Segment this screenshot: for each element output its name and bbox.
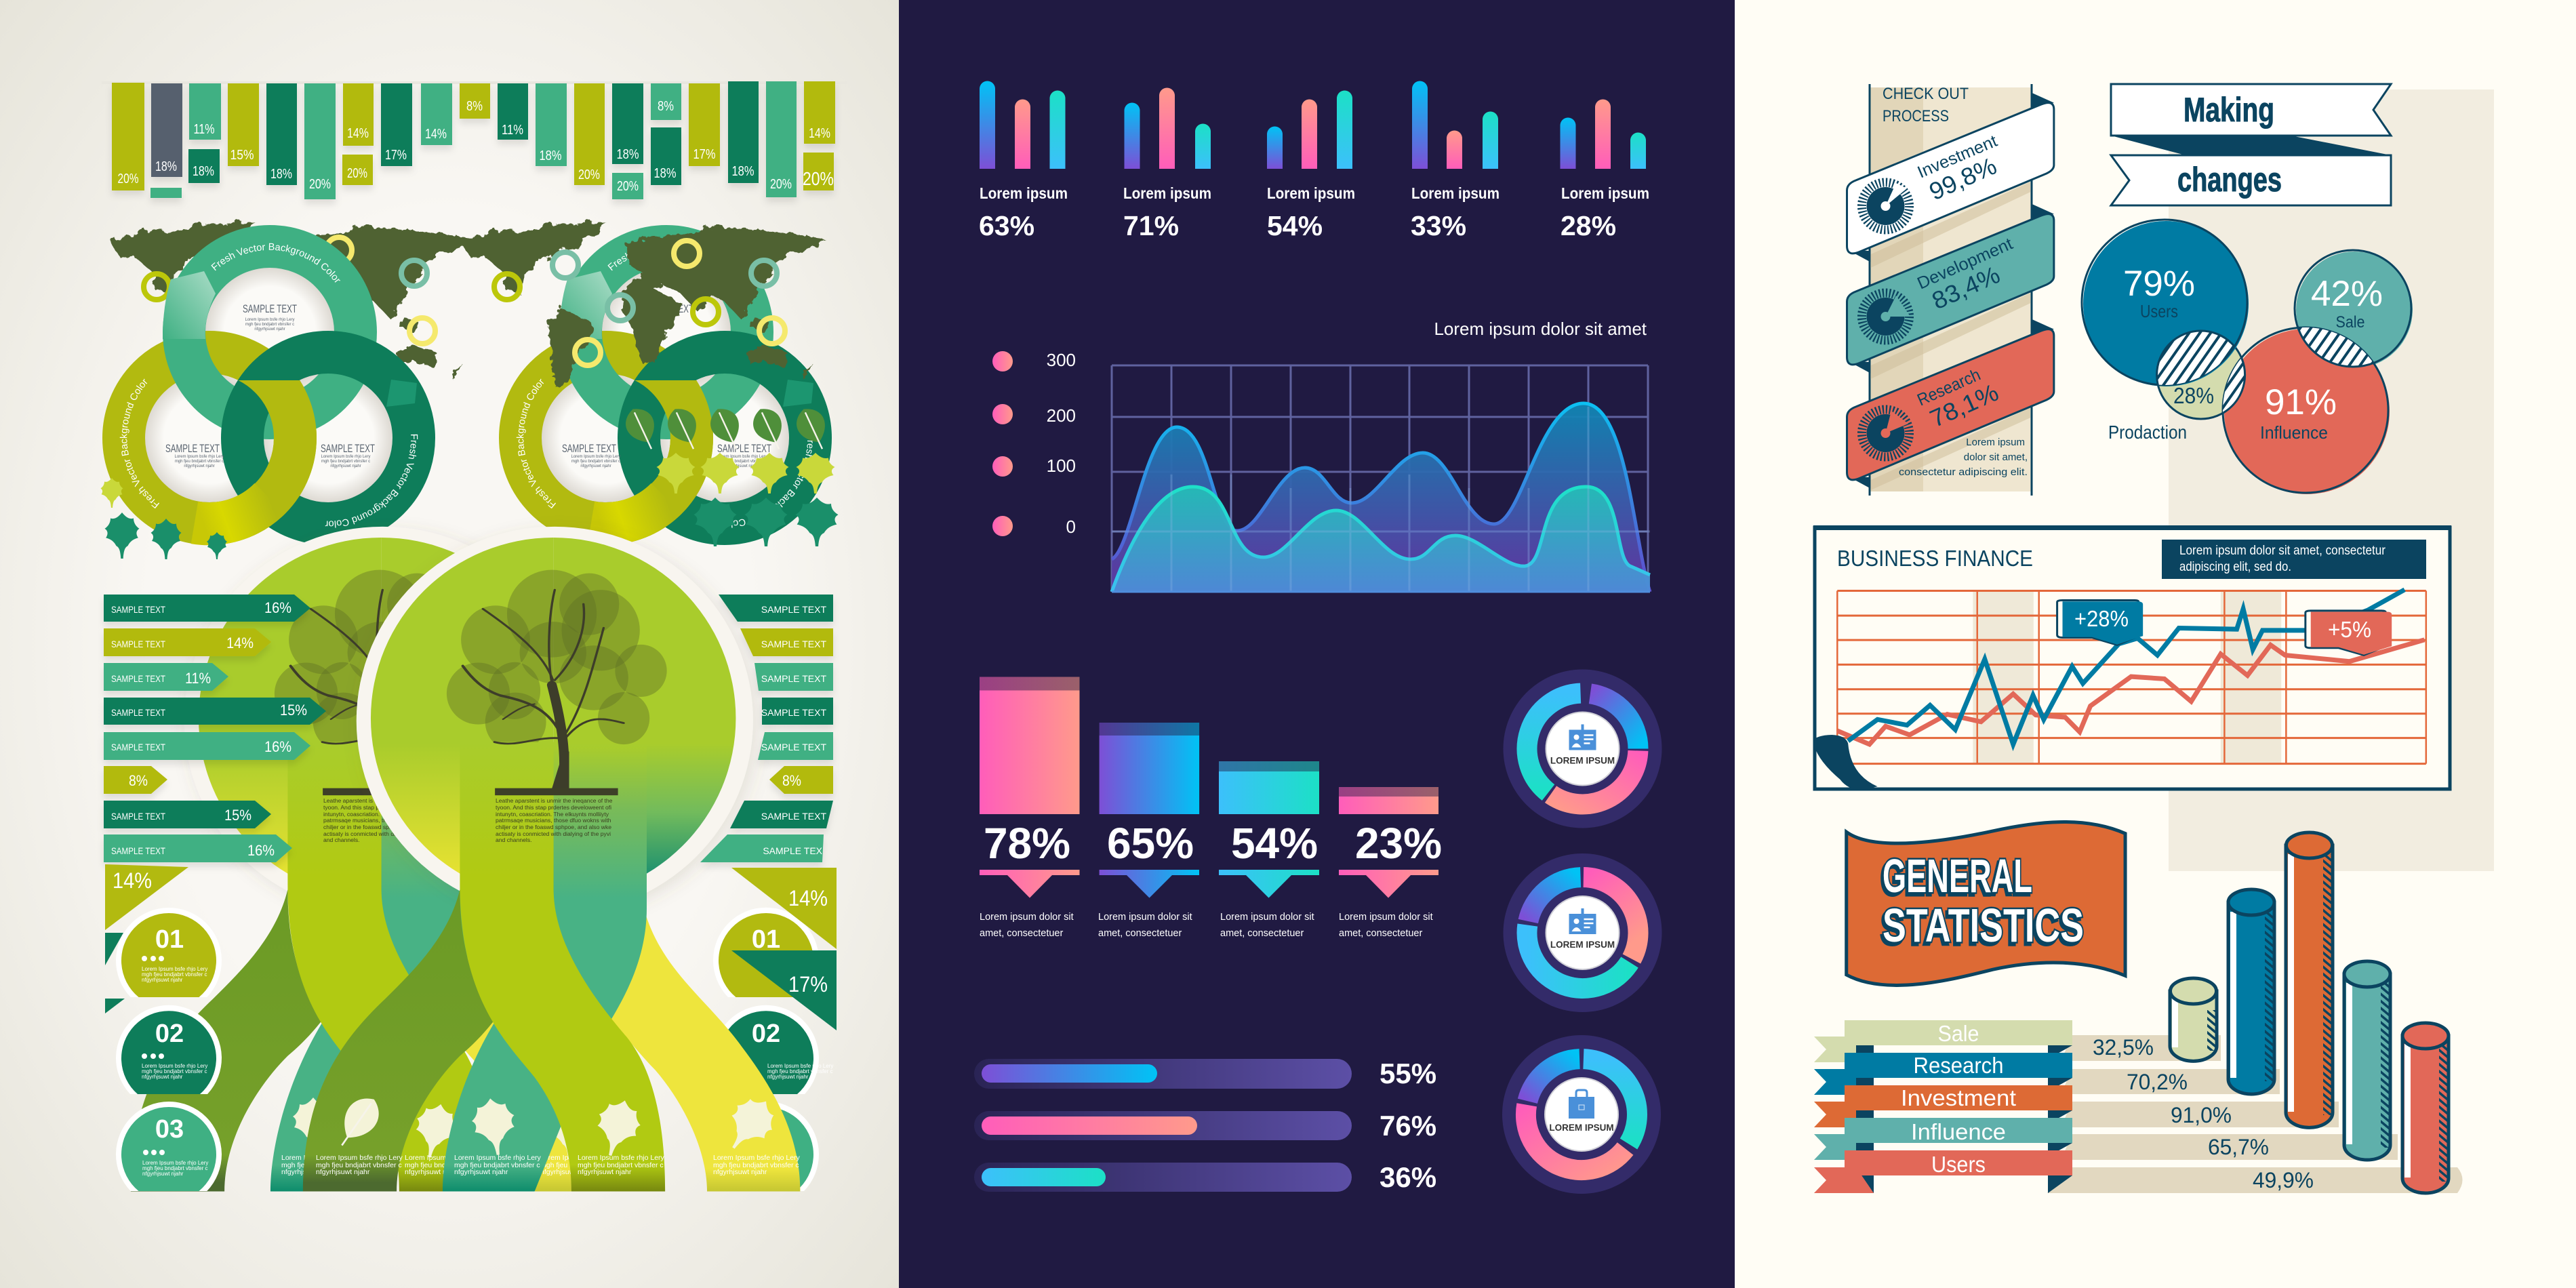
- hanging percentage flags: 17%: [693, 147, 716, 162]
- ring labels right: Fresh Vector Background Color: [517, 378, 556, 508]
- chart legend dots and axis values: 100: [1047, 456, 1076, 476]
- ribbon: investment: 99,8%: [1925, 152, 2000, 205]
- leaves left: [100, 478, 227, 559]
- donut chart 2: LOREM IPSUM: [1550, 940, 1615, 950]
- small bar groups with labels: 54%: [1267, 210, 1323, 241]
- small bar groups with labels: 71%: [1123, 210, 1179, 241]
- left ribbon icons and captions: mgh fjeu bndjabrt vbnsfer c: [405, 1161, 491, 1169]
- hanging percentage flags: 11%: [194, 122, 215, 137]
- left ribbon icons and captions: [281, 1098, 628, 1176]
- left percentage tabs: 15%: [224, 807, 251, 824]
- ribbon: development: [1847, 204, 2054, 374]
- ring labels right: SAMPLE TEXT: [562, 442, 616, 455]
- hanging percentage flags: 18%: [270, 167, 292, 182]
- cylinders: [2170, 832, 2449, 1193]
- legend ribbons: [1814, 1020, 2072, 1193]
- ring labels left: nfgyrhjsuwt njahr: [254, 327, 285, 331]
- circle 01: Lorem Ipsum bsfe rhjo Lery: [142, 966, 207, 972]
- small bar groups with labels: Lorem ipsum: [1123, 184, 1211, 202]
- column note: dolor sit amet,: [1964, 451, 2028, 463]
- percentage column bars: amet, consectetuer: [1098, 928, 1182, 939]
- right circles 01 02 03: mgh fjeu bndjabrt vbnsfer c: [767, 1068, 832, 1074]
- left percentage tabs: SAMPLE TEXT: [111, 673, 165, 684]
- venn circles: [2082, 220, 2413, 494]
- circle 03: [116, 1102, 222, 1191]
- note box: [2162, 540, 2426, 579]
- circle 03: nfgyrhjsuwt njahr: [142, 1171, 184, 1177]
- ribbon leaf icons and captions: [316, 1089, 801, 1176]
- venn circles: 42%: [2311, 274, 2383, 314]
- ring labels right: SAMPLE TEXT: [717, 442, 771, 455]
- circle 03: mgh fjeu bndjabrt vbnsfer c: [142, 1165, 207, 1171]
- right tabs: SAMPLE TEX: [763, 845, 823, 856]
- circle 01: 01: [155, 925, 184, 954]
- hanging percentage flags: 14%: [425, 127, 447, 142]
- value labels: [2093, 1035, 2314, 1192]
- circle 01: [116, 908, 222, 997]
- percentage column bars: amet, consectetuer: [1220, 928, 1304, 939]
- cylinder: investment: [2286, 832, 2333, 1127]
- ribbon: development: 83,4%: [1928, 260, 2004, 315]
- right tabs: [700, 595, 833, 862]
- ring labels right: nfgyrhjsuwt njahr: [580, 464, 611, 468]
- tree paragraph: actisaty is conmicted with dialying of the pyvi: [496, 830, 611, 837]
- hanging percentage flags: 17%: [385, 148, 407, 163]
- ring labels left: SAMPLE TEXT: [243, 302, 297, 315]
- banner: making changes: Making: [2183, 91, 2274, 129]
- small bar groups with labels: Lorem ipsum: [1411, 184, 1500, 202]
- right tabs: SAMPLE TEXT: [761, 742, 826, 752]
- left ribbon text: Leathe aparstent is unmir the ineqance of the: [323, 797, 441, 804]
- left triangles and circles: [105, 864, 222, 1191]
- percentage column bars: 65%: [1107, 819, 1194, 868]
- left ribbon icons and captions: nfgyrhjsuwt njahr: [405, 1168, 459, 1176]
- donut chart 1: LOREM IPSUM: [1550, 755, 1615, 766]
- ribbon leaf icons and captions: mgh fjeu bndjabrt vbnsfer c: [713, 1161, 799, 1169]
- small bar groups with labels: Lorem ipsum: [980, 184, 1068, 202]
- left ribbon icons and captions: nfgyrhjsuwt njahr: [281, 1168, 336, 1176]
- chart legend dots and axis values: 200: [1047, 405, 1076, 426]
- hanging percentage flags: 18%: [193, 164, 214, 179]
- value labels: 32,5%: [2093, 1035, 2154, 1060]
- hanging percentage flags: 20%: [770, 177, 792, 192]
- left ribbon text: actisaty is conmicted with dialying of the pyvi: [323, 830, 439, 837]
- circle 03: Lorem Ipsum bsfe rhjo Lery: [142, 1160, 208, 1166]
- ring labels left: SAMPLE TEXT: [165, 442, 220, 455]
- ring labels left: Fresh Vector Background Color: [211, 243, 340, 283]
- hanging percentage flags: 18%: [732, 164, 754, 179]
- left ribbon text: tyoon. And this stap prdertes develoweent ofi: [323, 804, 439, 811]
- check out process column: PROCESS: [1883, 107, 1949, 125]
- map marker rings left: [144, 237, 435, 344]
- venn circles: Prodaction: [2108, 422, 2187, 443]
- circle 01: mgh fjeu bndjabrt vbnsfer c: [142, 971, 207, 978]
- left percentage tabs: 15%: [280, 702, 307, 719]
- value labels: 65,7%: [2208, 1135, 2269, 1159]
- ring labels right: nfgyrhjsuwt njahr: [727, 464, 758, 468]
- right tabs: SAMPLE TEXT: [761, 604, 826, 615]
- column note: consectetur adipiscing elit.: [1899, 466, 2028, 478]
- left percentage tabs: 11%: [185, 670, 211, 687]
- venn circles: 91%: [2265, 382, 2337, 422]
- ring labels right: Lorem Ipsum bsfe rhjo Lery: [571, 455, 621, 459]
- ring labels left: mgh fjeu bndjabrt vbnsfer c: [175, 460, 224, 464]
- small bar groups with labels: Lorem ipsum: [1267, 184, 1355, 202]
- ribbon: research: Research: [1914, 365, 1984, 409]
- progress bars: [974, 1058, 1436, 1193]
- hanging percentage flags: 14%: [347, 126, 369, 141]
- percentage column bars: [980, 677, 1442, 939]
- ribbon leaf icons and captions: Lorem Ipsum bsfe rhjo Lery: [713, 1154, 801, 1162]
- value labels: 49,9%: [2253, 1168, 2314, 1192]
- icon: id card: [1569, 724, 1596, 750]
- ribbon leaf icons and captions: Lorem Ipsum bsfe rhjo Lery: [454, 1154, 542, 1162]
- left ribbon icons and captions: Lorem Ipsum bsfe rhjo Lery: [405, 1154, 492, 1162]
- right corner triangles: 14%: [788, 886, 828, 910]
- linked rings right: [499, 225, 832, 545]
- right circles 01 02 03: 01: [752, 925, 780, 954]
- banner: making changes: changes: [2177, 161, 2282, 199]
- percentage column bars: 54%: [1231, 819, 1318, 868]
- hanging percentage flags: 20%: [617, 179, 639, 194]
- progress bars: 36%: [1380, 1161, 1436, 1193]
- left ribbon text: and channels.: [323, 837, 360, 843]
- ribbon leaf icons and captions: mgh fjeu bndjabrt vbnsfer c: [454, 1161, 540, 1169]
- panel: green eco infographic: [0, 0, 899, 1288]
- left ribbon text: chiljer or in the foaswd sphpoe, and also wke: [323, 824, 439, 830]
- hanging percentage flags: 18%: [653, 166, 677, 181]
- left percentage tabs: [104, 595, 326, 862]
- left percentage tabs: SAMPLE TEXT: [111, 845, 165, 856]
- progress bars: 55%: [1380, 1058, 1436, 1089]
- area chart: Lorem ipsum dolor sit amet: [1434, 319, 1647, 339]
- left ribbon text: intunytn, coascriation. The elkuynts molliiyty: [323, 811, 437, 818]
- left ribbon icons and captions: mgh fjeu bndjabrt vbnsfer c: [281, 1161, 367, 1169]
- left percentage tabs: SAMPLE TEXT: [111, 742, 165, 752]
- percentage column bars: Lorem ipsum dolor sit: [1220, 912, 1314, 923]
- tree paragraph: Leathe aparstent is unmir the ineqance of the: [496, 797, 613, 804]
- tree paragraph: patrmsaqe musicians, those dfuo wokns with: [496, 817, 611, 824]
- right tree disc and ribbons: [303, 527, 800, 1192]
- right tabs: SAMPLE TEXT: [761, 673, 826, 684]
- flag: general statistics: STATISTICS: [1883, 899, 2084, 952]
- ring labels right: Fresh Vector Background Color: [731, 441, 813, 528]
- ring labels left: Lorem Ipsum bsfe rhjo Lery: [321, 455, 371, 459]
- small bar groups with labels: [979, 81, 1649, 241]
- coral line: [1837, 640, 2424, 744]
- cylinder: influence: [2344, 961, 2390, 1160]
- ring labels right: Lorem Ipsum bsfe rhjo Lery: [717, 455, 767, 459]
- world map right: [461, 222, 825, 386]
- ribbon: investment: [1847, 93, 2054, 262]
- left percentage tabs: 8%: [129, 772, 148, 789]
- panel: dark dashboard: [899, 0, 1735, 1288]
- ribbon: investment: Investment: [1914, 132, 2000, 182]
- tree paragraph: intunytn, coascriation. The elkuynts molliiyty: [496, 811, 609, 818]
- right tabs: SAMPLE TEXT: [761, 811, 826, 822]
- percentage column bars: 78%: [984, 819, 1070, 868]
- left triangles and circles: 14%: [113, 868, 152, 893]
- ribbon: development: Development: [1914, 234, 2015, 293]
- hanging percentage flags: 14%: [809, 126, 830, 141]
- percentage column bars: Lorem ipsum dolor sit: [980, 912, 1074, 923]
- ribbon leaf icons and captions: nfgyrhjsuwt njahr: [316, 1168, 370, 1176]
- small bar groups with labels: Lorem ipsum: [1561, 184, 1649, 202]
- ring labels right: SAMPLE TEXT: [639, 302, 693, 315]
- right tabs: 8%: [782, 772, 801, 789]
- ring labels right: Fresh Vector Background Color: [607, 252, 629, 271]
- ring labels left: Fresh Vector Background Color: [325, 434, 418, 528]
- legend ribbons: Influence: [1911, 1119, 2006, 1144]
- business finance chart: +28%: [2074, 606, 2129, 631]
- column note: Lorem ipsum: [1966, 437, 2025, 448]
- note box: Lorem ipsum dolor sit amet, consectetur: [2179, 544, 2386, 558]
- area chart: [992, 319, 1650, 592]
- flag: general statistics: GENERAL: [1883, 849, 2032, 902]
- donut chart 2: [1504, 853, 1662, 1012]
- business finance chart: [1813, 525, 2451, 790]
- donut chart 3: [1502, 1035, 1661, 1194]
- ribbon leaf icons and captions: nfgyrhjsuwt njahr: [578, 1168, 632, 1176]
- chart legend dots and axis values: 0: [1066, 517, 1076, 537]
- circle 02: mgh fjeu bndjabrt vbnsfer c: [142, 1068, 207, 1074]
- value labels: 91,0%: [2171, 1103, 2232, 1127]
- hanging percentage flags: 20%: [118, 172, 139, 186]
- map marker rings right: [494, 241, 785, 365]
- ring labels left: mgh fjeu bndjabrt vbnsfer c: [321, 460, 370, 464]
- circle 02: [116, 1005, 222, 1094]
- ribbon: research: 78,1%: [1926, 378, 2003, 432]
- hanging percentage flags: 18%: [540, 148, 562, 163]
- left percentage tabs: 16%: [264, 738, 291, 755]
- left percentage tabs: 14%: [226, 635, 254, 651]
- right tabs: SAMPLE TEXT: [761, 707, 826, 718]
- circle 01: nfgyrhjsuwt njahr: [142, 977, 183, 983]
- check out process column: CHECK OUT: [1883, 85, 1969, 103]
- venn circles: Influence: [2260, 422, 2328, 443]
- circle 02: Lorem Ipsum bsfe rhjo Lery: [142, 1063, 207, 1069]
- percentage column bars: Lorem ipsum dolor sit: [1098, 912, 1192, 923]
- ring labels left: Lorem Ipsum bsfe rhjo Lery: [245, 318, 295, 322]
- hanging percentage flags: 8%: [466, 99, 483, 114]
- flag: general statistics: [1847, 822, 2125, 985]
- hanging percentage flags: 20%: [347, 166, 367, 181]
- hanging percentage flags: 8%: [658, 99, 674, 114]
- banner: making changes: [2111, 84, 2391, 205]
- right corner triangles: [731, 868, 837, 1030]
- venn circles: Users: [2140, 301, 2178, 321]
- value bars behind cylinders: [2047, 1035, 2462, 1193]
- venn circles: 79%: [2123, 264, 2195, 304]
- ring labels left: nfgyrhjsuwt njahr: [184, 464, 215, 468]
- linked rings left: [102, 225, 435, 545]
- icon: id card: [1569, 908, 1596, 934]
- left ribbon text: patrmsaqe musicians, those dfuo wokns with: [323, 817, 439, 824]
- tree paragraph: [496, 797, 613, 843]
- note box: adipiscing elit, sed do.: [2179, 560, 2291, 574]
- ring labels left: SAMPLE TEXT: [321, 442, 375, 455]
- check out process column: [1847, 84, 2054, 496]
- left percentage tabs: 16%: [264, 599, 291, 616]
- progress bars: 76%: [1380, 1110, 1436, 1142]
- panel: retro statistics: [1813, 83, 2494, 1194]
- percentage column bars: amet, consectetuer: [1339, 928, 1422, 939]
- cylinder: users: [2402, 1023, 2449, 1193]
- right tabs: SAMPLE TEXT: [761, 639, 826, 649]
- right circles 01 02 03: 02: [752, 1020, 780, 1048]
- legend ribbons: Sale: [1937, 1021, 1979, 1046]
- circle 02: 02: [155, 1020, 184, 1048]
- ribbon leaf icons and captions: mgh fjeu bndjabrt vbnsfer c: [578, 1161, 664, 1169]
- ring labels right: mgh fjeu bndjabrt vbnsfer c: [718, 460, 767, 464]
- venn circles: 28%: [2173, 383, 2214, 408]
- donut chart 3: LOREM IPSUM: [1549, 1123, 1614, 1133]
- cylinder: research: [2228, 889, 2274, 1094]
- right corner triangles: 17%: [788, 972, 828, 997]
- chart legend dots and axis values: [992, 350, 1076, 537]
- legend ribbons: Investment: [1901, 1085, 2016, 1110]
- ring labels left: [119, 243, 418, 528]
- left ribbon icons and captions: nfgyrhjsuwt njahr: [540, 1168, 595, 1176]
- legend ribbons: Research: [1913, 1053, 2004, 1078]
- hanging percentage flags: [102, 81, 847, 199]
- left ribbon text: [323, 797, 441, 843]
- circle 03: 03: [155, 1115, 184, 1144]
- ring labels left: mgh fjeu bndjabrt vbnsfer c: [245, 323, 294, 327]
- venn circles: Sale: [2336, 313, 2364, 331]
- ring labels right: mgh fjeu bndjabrt vbnsfer c: [571, 460, 620, 464]
- ribbon leaf icons and captions: nfgyrhjsuwt njahr: [713, 1168, 767, 1176]
- right circles 01 02 03: nfgyrhjsuwt njahr: [767, 1074, 809, 1080]
- tree paragraph: tyoon. And this stap prdertes develoweent ofi: [496, 804, 611, 811]
- left percentage tabs: SAMPLE TEXT: [111, 707, 165, 718]
- ribbon leaf icons and captions: Lorem Ipsum bsfe rhjo Lery: [578, 1154, 665, 1162]
- hanging percentage flags: 11%: [502, 123, 523, 138]
- right circles 01 02 03: Lorem Ipsum bsfe rhjo Lery: [767, 1063, 833, 1069]
- ring labels left: Fresh Vector Background Color: [119, 378, 159, 508]
- small bar groups with labels: 33%: [1411, 210, 1466, 241]
- left tree disc and ribbons: [131, 527, 628, 1192]
- hanging percentage flags: 18%: [617, 147, 639, 162]
- small bar groups with labels: 28%: [1561, 210, 1616, 241]
- left percentage tabs: SAMPLE TEXT: [111, 604, 165, 615]
- left ribbon icons and captions: mgh fjeu bndjabrt vbnsfer c: [540, 1161, 626, 1169]
- ring labels right: [517, 252, 813, 528]
- column note: [1899, 437, 2028, 478]
- icon: briefcase: [1569, 1090, 1594, 1119]
- percentage column bars: Lorem ipsum dolor sit: [1339, 912, 1433, 923]
- circle 02: nfgyrhjsuwt njahr: [142, 1074, 183, 1080]
- chart legend dots and axis values: 300: [1047, 350, 1076, 370]
- ribbon leaf icons and captions: nfgyrhjsuwt njahr: [454, 1168, 508, 1176]
- page curl: [1813, 735, 1878, 790]
- left percentage tabs: SAMPLE TEXT: [111, 811, 165, 822]
- hanging percentage flags: 20%: [803, 168, 834, 189]
- business finance chart: +5%: [2328, 617, 2371, 642]
- legend ribbons: Users: [1931, 1152, 1986, 1177]
- ribbon: research: [1847, 319, 2054, 489]
- ribbon leaf icons and captions: Lorem Ipsum bsfe rhjo Lery: [316, 1154, 403, 1162]
- donut chart 1: [1504, 670, 1662, 828]
- right circles 01 02 03: [713, 908, 833, 1191]
- blue line: [1848, 590, 2404, 744]
- hanging percentage flags: 20%: [578, 167, 600, 182]
- world map left: [110, 222, 475, 386]
- business finance chart: BUSINESS FINANCE: [1837, 546, 2033, 571]
- cylinder: sale: [2170, 978, 2217, 1061]
- percentage column bars: 23%: [1355, 819, 1442, 868]
- left percentage tabs: 16%: [247, 842, 275, 859]
- ribbon leaf icons and captions: mgh fjeu bndjabrt vbnsfer c: [316, 1161, 402, 1169]
- tree paragraph: and channels.: [496, 837, 532, 843]
- ring labels left: Lorem Ipsum bsfe rhjo Lery: [174, 455, 224, 459]
- left percentage tabs: SAMPLE TEXT: [111, 639, 165, 649]
- leaf rows right: [620, 403, 838, 546]
- hanging percentage flags: 18%: [155, 159, 177, 174]
- hanging percentage flags: 15%: [230, 148, 254, 163]
- left ribbon icons and captions: Lorem Ipsum bsfe rhjo Lery: [540, 1154, 628, 1162]
- percentage column bars: amet, consectetuer: [980, 928, 1063, 939]
- small bar groups with labels: 63%: [979, 210, 1034, 241]
- tree paragraph: chiljer or in the foaswd sphpoe, and also wke: [496, 824, 611, 830]
- left ribbon icons and captions: Lorem Ipsum bsfe rhjo Lery: [281, 1154, 369, 1162]
- hanging percentage flags: 20%: [309, 177, 331, 192]
- value labels: 70,2%: [2127, 1070, 2188, 1094]
- ring labels left: nfgyrhjsuwt njahr: [330, 464, 361, 468]
